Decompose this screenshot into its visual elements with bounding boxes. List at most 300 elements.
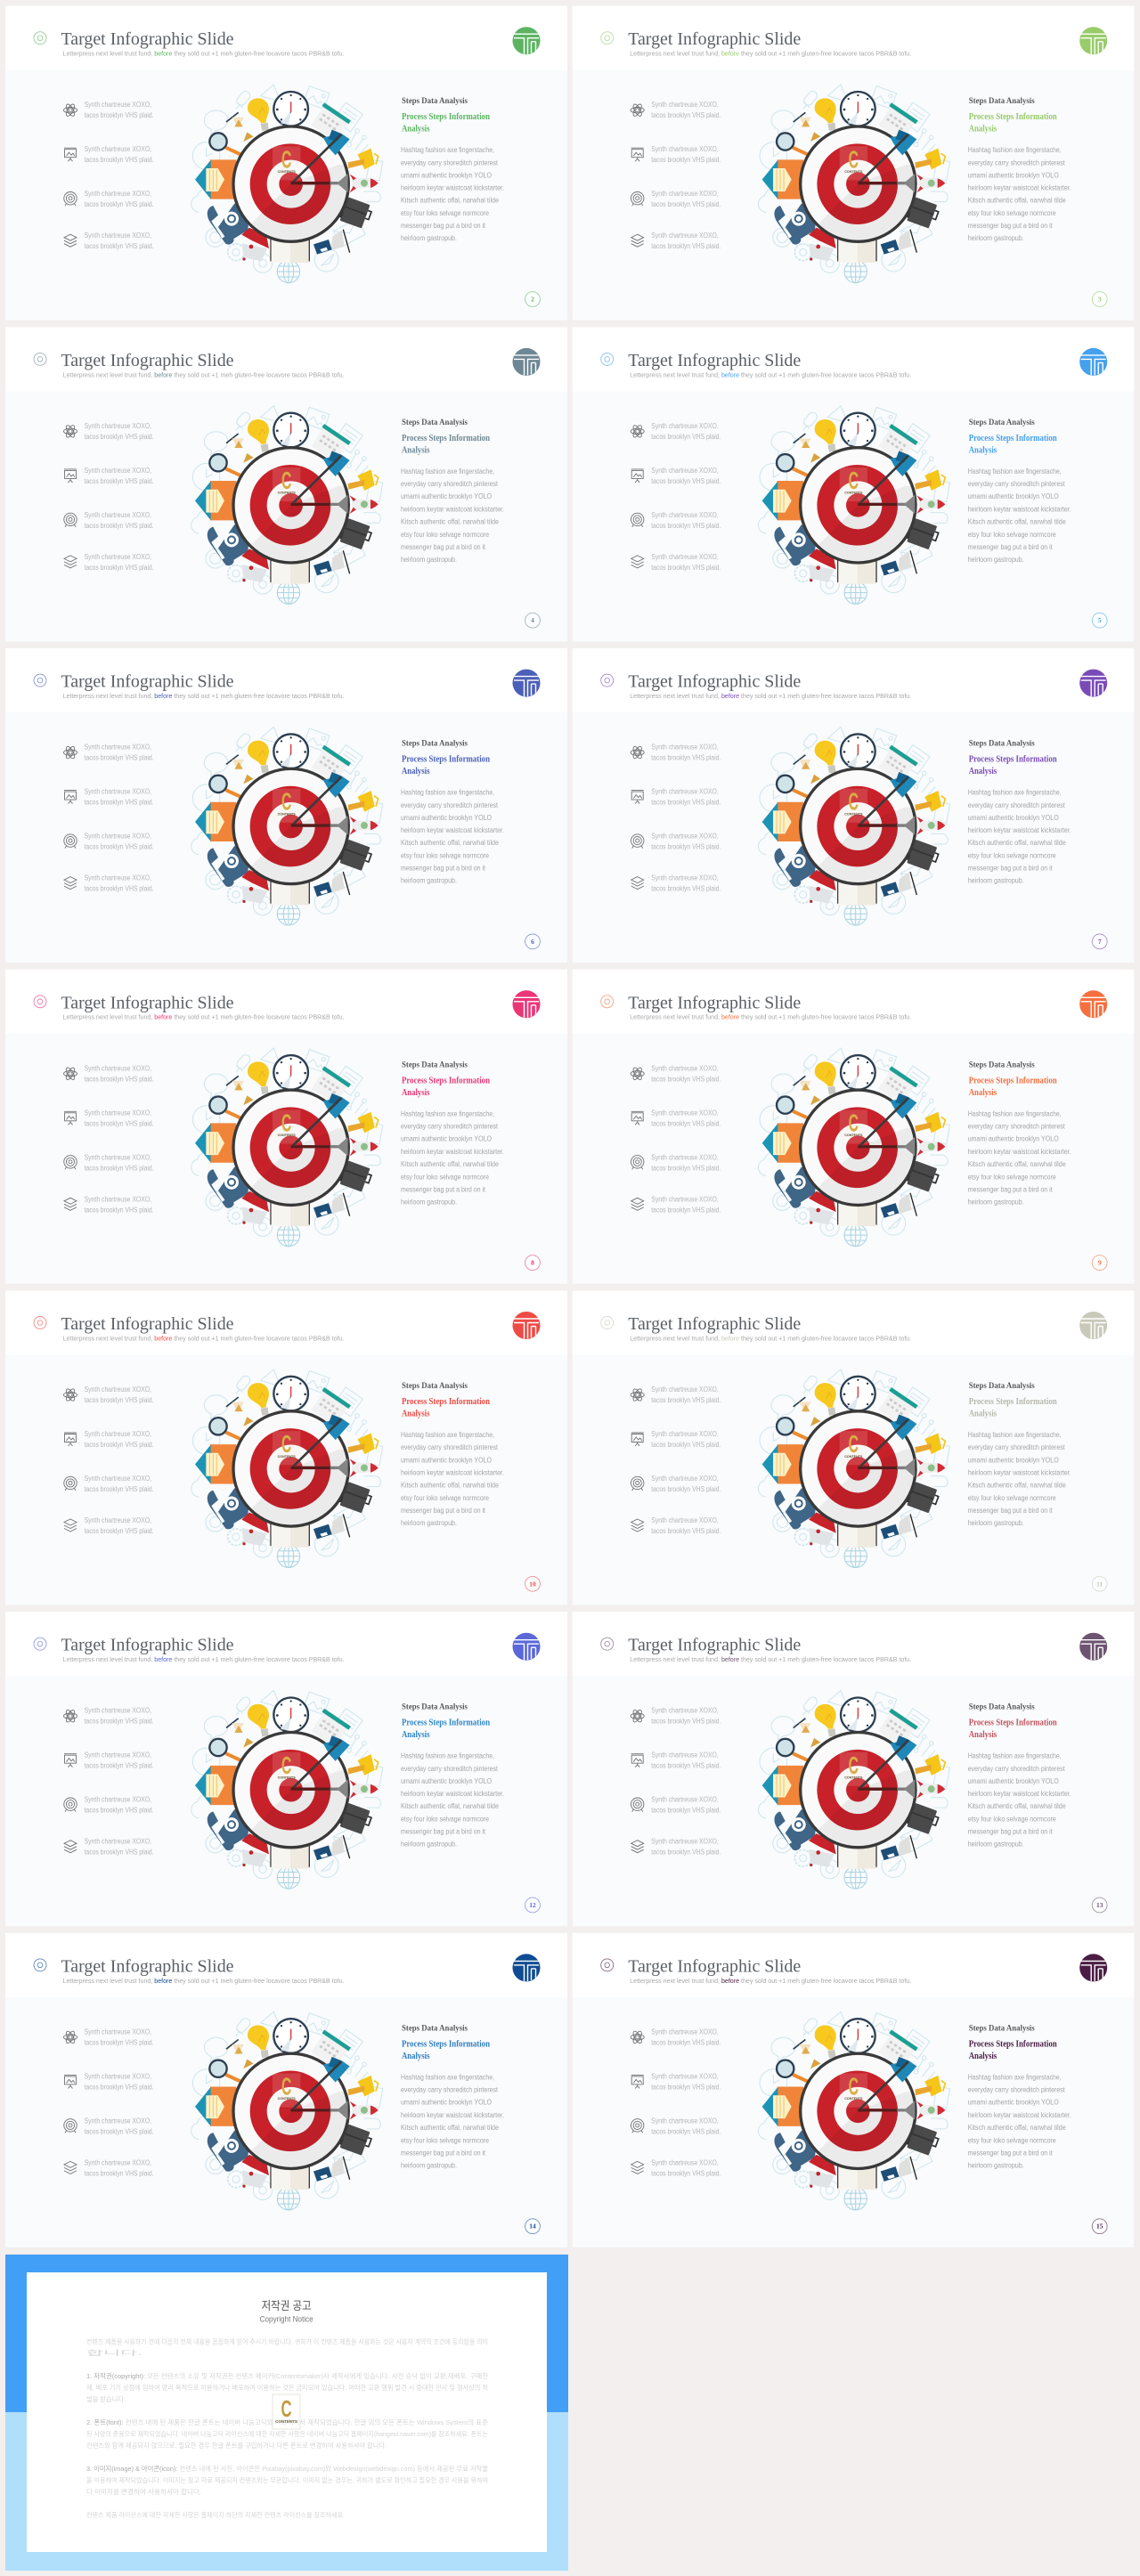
- header icon: [601, 1959, 614, 1971]
- subtitle: Letterpress next level trust fund, before they sold out +1 meh gluten-free locavore tacos PBR&B tofu.: [630, 1977, 911, 1985]
- left list: Synth chartreuse XOXO,: [651, 101, 719, 109]
- right text: heirloom gastropub.: [401, 1841, 457, 1849]
- logo: [1079, 1633, 1107, 1661]
- title: Target Infographic Slide: [628, 29, 801, 49]
- right text: Hashtag fashion axe fingerstache,: [968, 467, 1062, 475]
- right text: everyday carry shoreditch pinterest: [968, 1765, 1065, 1773]
- right text: Analysis: [969, 1409, 997, 1419]
- right text: Steps Data Analysis: [969, 1060, 1035, 1069]
- page number: 4: [531, 616, 534, 624]
- header icon: [34, 1316, 46, 1329]
- left list: Synth chartreuse XOXO,: [651, 232, 719, 240]
- right text: Hashtag fashion axe fingerstache,: [968, 1752, 1062, 1760]
- right text: etsy four loko selvage normcore: [968, 852, 1056, 860]
- right text: etsy four loko selvage normcore: [968, 209, 1056, 217]
- right text: etsy four loko selvage normcore: [968, 531, 1056, 539]
- left list: Synth chartreuse XOXO,: [651, 1475, 719, 1483]
- left list: tacos brooklyn VHS plaid.: [85, 2169, 154, 2177]
- page number: 14: [529, 2223, 536, 2231]
- page number: 11: [1096, 1580, 1103, 1588]
- logo: [513, 1633, 540, 1661]
- left list: tacos brooklyn VHS plaid.: [651, 1718, 721, 1726]
- left list: tacos brooklyn VHS plaid.: [85, 2127, 154, 2135]
- target illustration: [191, 1048, 383, 1247]
- left list: Synth chartreuse XOXO,: [651, 1707, 719, 1715]
- page number: 13: [1096, 1901, 1103, 1909]
- copyright notice slide: [5, 2255, 568, 2571]
- left list: tacos brooklyn VHS plaid.: [85, 433, 154, 441]
- left list: Synth chartreuse XOXO,: [85, 1195, 151, 1203]
- right text: etsy four loko selvage normcore: [401, 852, 489, 860]
- right text: messenger bag put a bird on it: [968, 543, 1053, 551]
- left list: tacos brooklyn VHS plaid.: [85, 885, 154, 893]
- target illustration: [191, 406, 383, 604]
- page number: [1092, 292, 1107, 306]
- target illustration: [191, 2011, 383, 2210]
- right text: everyday carry shoreditch pinterest: [968, 158, 1065, 167]
- right text: etsy four loko selvage normcore: [968, 1816, 1056, 1824]
- left list: [64, 1064, 154, 1214]
- left list: tacos brooklyn VHS plaid.: [85, 1119, 154, 1127]
- header icon: [601, 1637, 614, 1650]
- left list: tacos brooklyn VHS plaid.: [651, 843, 721, 851]
- right text: umami authentic brooklyn YOLO: [401, 2099, 492, 2107]
- page number: 2: [531, 295, 534, 303]
- right text: [968, 1382, 1071, 1527]
- left list: tacos brooklyn VHS plaid.: [651, 1075, 721, 1083]
- right text: heirloom keytar waistcoat kickstarter.: [968, 184, 1071, 192]
- right text: umami authentic brooklyn YOLO: [968, 2099, 1059, 2107]
- left list: Synth chartreuse XOXO,: [651, 1838, 719, 1846]
- right text: Process Steps Information: [402, 112, 490, 122]
- left list: Synth chartreuse XOXO,: [651, 422, 719, 430]
- left list: tacos brooklyn VHS plaid.: [85, 1164, 154, 1172]
- right text: everyday carry shoreditch pinterest: [968, 1443, 1065, 1451]
- header icon: [601, 674, 614, 687]
- right text: umami authentic brooklyn YOLO: [401, 1456, 492, 1464]
- left list: tacos brooklyn VHS plaid.: [651, 754, 721, 762]
- left list: Synth chartreuse XOXO,: [651, 1386, 719, 1394]
- slide 8: pink: [5, 970, 567, 1284]
- right text: Analysis: [402, 445, 429, 455]
- title: Target Infographic Slide: [61, 1314, 234, 1334]
- left list: Synth chartreuse XOXO,: [85, 744, 151, 752]
- subtitle: Letterpress next level trust fund, before they sold out +1 meh gluten-free locavore tacos PBR&B tofu.: [62, 692, 344, 700]
- left list: tacos brooklyn VHS plaid.: [85, 1206, 154, 1214]
- right text: etsy four loko selvage normcore: [401, 1173, 489, 1181]
- title: Target Infographic Slide: [628, 1956, 801, 1976]
- subtitle: Letterpress next level trust fund, before they sold out +1 meh gluten-free locavore tacos PBR&B tofu.: [630, 370, 911, 378]
- right text: messenger bag put a bird on it: [401, 1828, 486, 1836]
- left list: Synth chartreuse XOXO,: [85, 833, 151, 841]
- right text: Analysis: [969, 125, 997, 134]
- left list: Synth chartreuse XOXO,: [651, 145, 719, 153]
- left list: [631, 744, 721, 893]
- right text: Kitsch authentic offal, narwhal tilde: [401, 517, 499, 525]
- right text: heirloom gastropub.: [968, 1519, 1024, 1527]
- subtitle: Letterpress next level trust fund, before they sold out +1 meh gluten-free locavore tacos PBR&B tofu.: [62, 1655, 344, 1663]
- left list: tacos brooklyn VHS plaid.: [651, 885, 721, 893]
- right text: Kitsch authentic offal, narwhal tilde: [401, 1482, 499, 1489]
- right text: heirloom gastropub.: [968, 234, 1024, 242]
- right text: Hashtag fashion axe fingerstache,: [401, 789, 494, 797]
- left list: [64, 422, 154, 572]
- title: Target Infographic Slide: [61, 351, 234, 370]
- left list: tacos brooklyn VHS plaid.: [651, 156, 721, 164]
- right text: Kitsch authentic offal, narwhal tilde: [968, 517, 1066, 525]
- right text: Process Steps Information: [969, 112, 1057, 122]
- title: Target Infographic Slide: [61, 672, 234, 692]
- left list: Synth chartreuse XOXO,: [651, 1430, 719, 1438]
- right text: heirloom gastropub.: [968, 2161, 1024, 2169]
- right text: heirloom gastropub.: [401, 556, 457, 564]
- left list: Synth chartreuse XOXO,: [85, 1796, 151, 1804]
- right text: heirloom keytar waistcoat kickstarter.: [968, 2111, 1071, 2119]
- header icon: [34, 1637, 46, 1650]
- left list: Synth chartreuse XOXO,: [85, 190, 151, 198]
- right text: Process Steps Information: [969, 1719, 1057, 1728]
- left list: tacos brooklyn VHS plaid.: [651, 1206, 721, 1214]
- logo: [513, 27, 540, 54]
- left list: [64, 101, 154, 250]
- subtitle: Letterpress next level trust fund, before they sold out +1 meh gluten-free locavore tacos PBR&B tofu.: [630, 1013, 911, 1021]
- left list: Synth chartreuse XOXO,: [651, 1796, 719, 1804]
- left list: tacos brooklyn VHS plaid.: [85, 754, 154, 762]
- right text: heirloom gastropub.: [401, 2161, 457, 2169]
- logo: [513, 670, 540, 697]
- page number: 9: [1098, 1259, 1102, 1267]
- page number: [525, 1255, 540, 1270]
- right text: etsy four loko selvage normcore: [968, 2136, 1056, 2144]
- watermark: CONTENTS: [275, 2419, 297, 2424]
- right text: Steps Data Analysis: [969, 418, 1035, 427]
- copyright body text: 합니다.: [86, 2349, 142, 2357]
- right text: Analysis: [402, 1409, 429, 1419]
- left list: tacos brooklyn VHS plaid.: [651, 1441, 721, 1449]
- right text: Analysis: [402, 767, 429, 776]
- target illustration: [758, 727, 949, 925]
- header icon: [34, 32, 46, 45]
- left list: tacos brooklyn VHS plaid.: [651, 477, 721, 485]
- slide 7: purple: [573, 648, 1134, 963]
- subtitle: Letterpress next level trust fund, before they sold out +1 meh gluten-free locavore tacos PBR&B tofu.: [630, 692, 911, 700]
- left list: Synth chartreuse XOXO,: [85, 1838, 151, 1846]
- right text: Kitsch authentic offal, narwhal tilde: [968, 1802, 1066, 1810]
- title: Target Infographic Slide: [628, 351, 801, 370]
- logo: [1079, 1312, 1107, 1339]
- subtitle: Letterpress next level trust fund, before they sold out +1 meh gluten-free locavore tacos PBR&B tofu.: [62, 1977, 344, 1985]
- right text: Steps Data Analysis: [402, 1703, 468, 1712]
- left list: Synth chartreuse XOXO,: [85, 1109, 151, 1117]
- subtitle: Letterpress next level trust fund, before they sold out +1 meh gluten-free locavore tacos PBR&B tofu.: [630, 1334, 911, 1342]
- page number: 3: [1098, 295, 1102, 303]
- left list: Synth chartreuse XOXO,: [651, 190, 719, 198]
- right text: Hashtag fashion axe fingerstache,: [401, 1431, 494, 1439]
- slide 15: maroon: [573, 1933, 1134, 2247]
- logo: [513, 1312, 540, 1339]
- left list: tacos brooklyn VHS plaid.: [85, 1718, 154, 1726]
- right text: umami authentic brooklyn YOLO: [401, 814, 492, 822]
- right text: umami authentic brooklyn YOLO: [968, 492, 1059, 500]
- left list: Synth chartreuse XOXO,: [85, 2072, 151, 2080]
- left list: Synth chartreuse XOXO,: [651, 1064, 719, 1072]
- right text: everyday carry shoreditch pinterest: [401, 158, 499, 167]
- right text: Kitsch authentic offal, narwhal tilde: [401, 839, 499, 847]
- title: Target Infographic Slide: [628, 993, 801, 1012]
- left list: tacos brooklyn VHS plaid.: [651, 2038, 721, 2046]
- right text: etsy four loko selvage normcore: [401, 1816, 489, 1824]
- page number: [525, 1576, 540, 1591]
- watermark: C: [281, 2395, 292, 2422]
- right text: Process Steps Information: [969, 755, 1057, 765]
- right text: heirloom keytar waistcoat kickstarter.: [968, 1148, 1071, 1156]
- right text: everyday carry shoreditch pinterest: [968, 801, 1065, 809]
- right text: Steps Data Analysis: [969, 2024, 1035, 2033]
- logo: [513, 990, 540, 1018]
- right text: Kitsch authentic offal, narwhal tilde: [968, 1482, 1066, 1489]
- left list: tacos brooklyn VHS plaid.: [651, 111, 721, 119]
- right text: Hashtag fashion axe fingerstache,: [968, 789, 1062, 797]
- right text: Hashtag fashion axe fingerstache,: [968, 1109, 1062, 1117]
- slide 14: navy: [5, 1933, 567, 2247]
- right text: Hashtag fashion axe fingerstache,: [401, 467, 494, 475]
- left list: tacos brooklyn VHS plaid.: [651, 2169, 721, 2177]
- right text: umami authentic brooklyn YOLO: [401, 172, 492, 180]
- title: Target Infographic Slide: [61, 1636, 234, 1655]
- left list: Synth chartreuse XOXO,: [85, 1751, 151, 1759]
- left list: tacos brooklyn VHS plaid.: [651, 2083, 721, 2091]
- left list: Synth chartreuse XOXO,: [651, 874, 719, 882]
- slide 3: light green: [573, 6, 1134, 321]
- copyright body text: 2. 폰트(font): 컨텐츠 내에 된 제품은 한글 폰트는 네이버 나눔고딕와 서울체에서 제작되었습니다. 한글 외의 모든 폰트는 Windows System의 표준: [86, 2418, 488, 2426]
- title: Target Infographic Slide: [628, 1314, 801, 1334]
- copyright body text: 벌을 받습니다.: [86, 2395, 126, 2403]
- left list: tacos brooklyn VHS plaid.: [85, 1807, 154, 1815]
- right text: Process Steps Information: [402, 1719, 490, 1728]
- right text: Process Steps Information: [402, 434, 490, 443]
- right text: Steps Data Analysis: [402, 1382, 468, 1391]
- right text: umami authentic brooklyn YOLO: [401, 1777, 492, 1785]
- left list: [631, 422, 721, 572]
- left list: tacos brooklyn VHS plaid.: [85, 477, 154, 485]
- left list: Synth chartreuse XOXO,: [651, 467, 719, 475]
- header icon: [601, 32, 614, 45]
- right text: Process Steps Information: [969, 434, 1057, 443]
- left list: [64, 1707, 154, 1857]
- right text: Steps Data Analysis: [969, 97, 1035, 106]
- page number: [525, 934, 540, 949]
- right text: umami authentic brooklyn YOLO: [401, 1135, 492, 1143]
- right text: Hashtag fashion axe fingerstache,: [401, 146, 494, 154]
- right text: Hashtag fashion axe fingerstache,: [401, 1109, 494, 1117]
- right text: Kitsch authentic offal, narwhal tilde: [968, 2124, 1066, 2132]
- left list: Synth chartreuse XOXO,: [651, 511, 719, 519]
- right text: [968, 1703, 1071, 1849]
- right text: messenger bag put a bird on it: [968, 865, 1053, 873]
- page number: 15: [1096, 2223, 1103, 2231]
- left list: tacos brooklyn VHS plaid.: [85, 200, 154, 208]
- slide 13: mauve: [573, 1612, 1134, 1926]
- target illustration: [191, 1690, 383, 1889]
- right text: heirloom keytar waistcoat kickstarter.: [968, 826, 1071, 834]
- page number: [1092, 613, 1107, 628]
- right text: etsy four loko selvage normcore: [968, 1494, 1056, 1502]
- logo: [1079, 990, 1107, 1018]
- target illustration: [758, 1048, 949, 1247]
- right text: Kitsch authentic offal, narwhal tilde: [401, 1802, 499, 1810]
- left list: Synth chartreuse XOXO,: [85, 1386, 151, 1394]
- right text: Hashtag fashion axe fingerstache,: [401, 2073, 494, 2081]
- right text: heirloom gastropub.: [968, 877, 1024, 885]
- left list: tacos brooklyn VHS plaid.: [651, 564, 721, 572]
- right text: heirloom gastropub.: [968, 1198, 1024, 1206]
- page number: [525, 1897, 540, 1913]
- right text: Analysis: [402, 125, 429, 134]
- left list: Synth chartreuse XOXO,: [651, 2117, 719, 2125]
- target illustration: [758, 1690, 949, 1889]
- logo: [1079, 1954, 1107, 1981]
- target illustration: [758, 406, 949, 604]
- right text: Kitsch authentic offal, narwhal tilde: [968, 839, 1066, 847]
- left list: Synth chartreuse XOXO,: [85, 422, 151, 430]
- right text: messenger bag put a bird on it: [401, 2149, 486, 2157]
- left list: Synth chartreuse XOXO,: [85, 874, 151, 882]
- page number: [1092, 1897, 1107, 1913]
- left list: tacos brooklyn VHS plaid.: [651, 1527, 721, 1535]
- left list: Synth chartreuse XOXO,: [651, 833, 719, 841]
- right text: everyday carry shoreditch pinterest: [401, 480, 499, 488]
- logo: [513, 348, 540, 376]
- right text: umami authentic brooklyn YOLO: [401, 492, 492, 500]
- right text: messenger bag put a bird on it: [968, 222, 1053, 230]
- title: Target Infographic Slide: [628, 672, 801, 692]
- left list: Synth chartreuse XOXO,: [85, 1153, 151, 1161]
- left list: Synth chartreuse XOXO,: [651, 744, 719, 752]
- left list: Synth chartreuse XOXO,: [85, 1707, 151, 1715]
- title: Target Infographic Slide: [61, 993, 234, 1012]
- left list: Synth chartreuse XOXO,: [651, 2158, 719, 2166]
- logo: [513, 1954, 540, 1981]
- header icon: [601, 1316, 614, 1329]
- page number: 10: [529, 1580, 536, 1588]
- left list: [64, 744, 154, 893]
- left list: tacos brooklyn VHS plaid.: [651, 1164, 721, 1172]
- left list: tacos brooklyn VHS plaid.: [85, 1396, 154, 1404]
- slide 6: indigo: [5, 648, 567, 963]
- right text: [401, 2024, 504, 2169]
- left list: Synth chartreuse XOXO,: [85, 788, 151, 796]
- left list: tacos brooklyn VHS plaid.: [651, 1807, 721, 1815]
- right text: Process Steps Information: [402, 1397, 490, 1407]
- logo: [1079, 27, 1107, 54]
- target illustration: [758, 85, 949, 283]
- left list: Synth chartreuse XOXO,: [85, 553, 151, 561]
- right text: Steps Data Analysis: [402, 2024, 468, 2033]
- right text: [401, 1382, 504, 1527]
- left list: tacos brooklyn VHS plaid.: [651, 1396, 721, 1404]
- right text: Analysis: [402, 2052, 429, 2061]
- right text: heirloom gastropub.: [968, 556, 1024, 564]
- copyright body text: 3. 이미지(image) & 아이콘(icon): 컨텐츠 내에 된 사진, 아이콘은 Pixabay(pixabay.com)와 Webdesign(webdesign.com) 등에서 제공된 무료 저작물: [86, 2465, 488, 2473]
- page number: 12: [529, 1901, 536, 1909]
- right text: heirloom keytar waistcoat kickstarter.: [401, 826, 504, 834]
- right text: Kitsch authentic offal, narwhal tilde: [968, 197, 1066, 205]
- left list: Synth chartreuse XOXO,: [651, 2072, 719, 2080]
- right text: Process Steps Information: [969, 2039, 1057, 2049]
- left list: tacos brooklyn VHS plaid.: [85, 111, 154, 119]
- slide 2: green: [5, 6, 567, 321]
- slide 10: red: [5, 1291, 567, 1605]
- left list: tacos brooklyn VHS plaid.: [651, 242, 721, 250]
- right text: umami authentic brooklyn YOLO: [968, 1135, 1059, 1143]
- right text: heirloom keytar waistcoat kickstarter.: [401, 1148, 504, 1156]
- left list: Synth chartreuse XOXO,: [651, 553, 719, 561]
- right text: heirloom keytar waistcoat kickstarter.: [968, 505, 1071, 513]
- left list: [631, 1707, 721, 1857]
- right text: messenger bag put a bird on it: [401, 543, 486, 551]
- left list: Synth chartreuse XOXO,: [85, 1516, 151, 1524]
- left list: tacos brooklyn VHS plaid.: [85, 2038, 154, 2046]
- left list: Synth chartreuse XOXO,: [85, 2027, 151, 2036]
- title: Target Infographic Slide: [61, 1956, 234, 1976]
- subtitle: Letterpress next level trust fund, before they sold out +1 meh gluten-free locavore tacos PBR&B tofu.: [62, 370, 344, 378]
- copyright body text: 을 이용하여 제작되었습니다. 이미지는 참고 자료 제공되지 컨텐츠와는 무관합니다. 이미지 없는 경우는, 귀하가 별도로 확인하고 필요한 경우 사용을 위하여: [86, 2476, 488, 2484]
- target illustration: [191, 1369, 383, 1567]
- right text: [968, 2024, 1071, 2169]
- left list: tacos brooklyn VHS plaid.: [85, 564, 154, 572]
- right text: heirloom keytar waistcoat kickstarter.: [401, 1790, 504, 1798]
- right text: Process Steps Information: [402, 2039, 490, 2049]
- right text: heirloom gastropub.: [968, 1841, 1024, 1849]
- right text: everyday carry shoreditch pinterest: [401, 1443, 499, 1451]
- right text: heirloom keytar waistcoat kickstarter.: [401, 184, 504, 192]
- right text: Steps Data Analysis: [969, 1703, 1035, 1712]
- left list: tacos brooklyn VHS plaid.: [651, 799, 721, 807]
- left list: tacos brooklyn VHS plaid.: [651, 1762, 721, 1770]
- slide 4: slate: [5, 327, 567, 641]
- right text: Steps Data Analysis: [402, 1060, 468, 1069]
- right text: Kitsch authentic offal, narwhal tilde: [968, 1160, 1066, 1168]
- header icon: [34, 1959, 46, 1971]
- right text: Hashtag fashion axe fingerstache,: [968, 146, 1062, 154]
- right text: [968, 740, 1071, 885]
- copyright body text: 다 이미지를 변경하여 사용하셔야 합니다.: [86, 2488, 201, 2496]
- right text: [968, 97, 1071, 242]
- target illustration: [758, 2011, 949, 2210]
- right text: etsy four loko selvage normcore: [401, 1494, 489, 1502]
- right text: Process Steps Information: [402, 755, 490, 765]
- right text: Analysis: [969, 767, 997, 776]
- right text: Hashtag fashion axe fingerstache,: [401, 1752, 494, 1760]
- logo: [1079, 670, 1107, 697]
- left list: Synth chartreuse XOXO,: [85, 1064, 151, 1072]
- left list: Synth chartreuse XOXO,: [85, 2117, 151, 2125]
- right text: everyday carry shoreditch pinterest: [401, 1123, 499, 1131]
- left list: Synth chartreuse XOXO,: [85, 1475, 151, 1483]
- right text: everyday carry shoreditch pinterest: [968, 2086, 1065, 2094]
- page number: 7: [1098, 938, 1102, 946]
- page number: 5: [1098, 616, 1102, 624]
- left list: Synth chartreuse XOXO,: [651, 1153, 719, 1161]
- right text: Process Steps Information: [402, 1076, 490, 1085]
- right text: heirloom gastropub.: [401, 234, 457, 242]
- page number: [1092, 1576, 1107, 1591]
- copyright subheading: Copyright Notice: [260, 2315, 314, 2324]
- left list: tacos brooklyn VHS plaid.: [85, 1441, 154, 1449]
- copyright body text: 컨텐츠 제품을 사용하기 전에 다음의 전체 내용을 꼼꼼하게 읽어 주시기 바랍니다. 귀하가 이 컨텐츠 제품을 사용하는 것은 사용자 계약의 조건에 동의함을 의미: [86, 2338, 488, 2346]
- copyright body text: 1. 저작권(copyright): 모든 컨텐츠의 소유 및 저작권은 컨텐츠 메이커(Contentsmaker)사 제작사에게 있습니다. 사전 승낙 없이 교환,재배포, 구매한: [86, 2372, 488, 2380]
- right text: [968, 1060, 1071, 1206]
